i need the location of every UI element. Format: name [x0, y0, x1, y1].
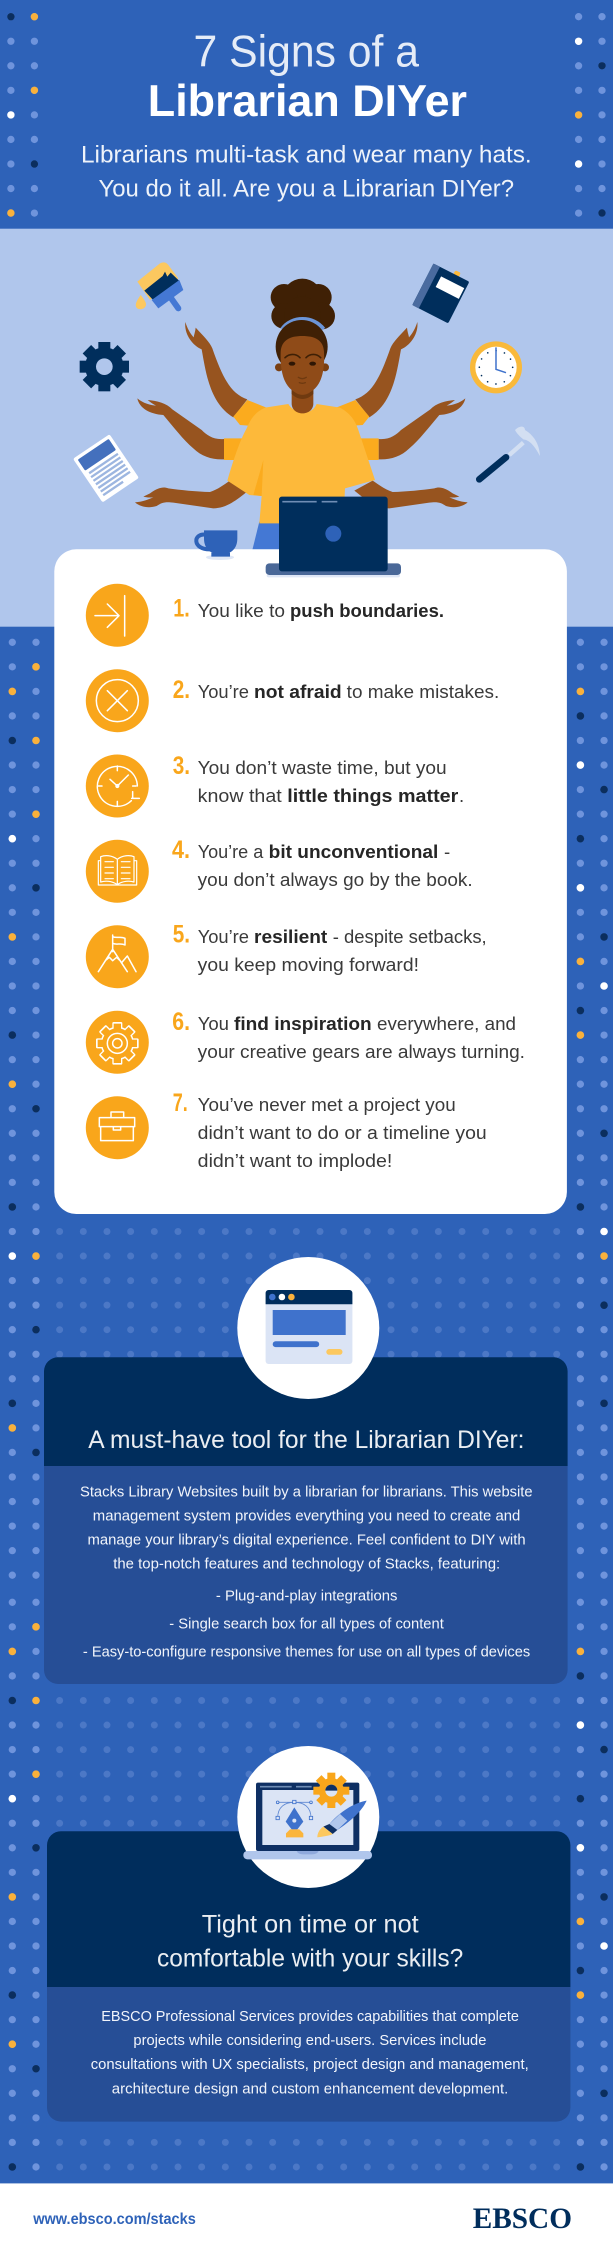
header dots: [11, 17, 602, 215]
sign 2: You’re: [198, 681, 249, 702]
panel: seven signs list: [54, 549, 567, 1214]
icon: gear: [80, 342, 129, 391]
sign 2: to make mistakes.: [347, 681, 499, 702]
sign 2: not afraid: [254, 681, 342, 702]
sign 5: - despite setbacks,: [333, 926, 487, 947]
sign 3: little things matter: [287, 785, 458, 806]
sign 6: 6.: [172, 1008, 190, 1036]
subtitle: Librarians multi-task and wear many hats.: [81, 141, 532, 168]
subtitle: [81, 141, 532, 203]
footer url: www.ebsco.com/stacks: [32, 2211, 196, 2228]
sign 4: bit unconventional: [269, 841, 438, 862]
body text: projects while considering end-users. Services include: [133, 2032, 486, 2049]
heading: [157, 1911, 463, 1972]
sign 5: resilient: [254, 926, 327, 947]
title: 7 Signs of a: [194, 28, 419, 77]
sign 7: 7.: [173, 1089, 188, 1117]
sign 4: 4.: [172, 836, 190, 864]
subtitle: You do it all. Are you a Librarian DIYer?: [98, 176, 514, 203]
title: Librarian DIYer: [148, 77, 467, 126]
sign 7: didn’t want to do or a timeline you: [198, 1122, 487, 1143]
sign 5: you keep moving forward!: [198, 954, 419, 975]
sign 7: didn’t want to implode!: [198, 1150, 392, 1171]
sign 3: know that: [198, 785, 283, 806]
sign 1: push boundaries.: [290, 600, 444, 621]
heading: comfortable with your skills?: [157, 1944, 463, 1972]
icon: book: [412, 260, 471, 323]
sign 7: [86, 1089, 487, 1171]
body text: management system provides everything you need to create and: [93, 1508, 520, 1525]
body text: - Easy-to-configure responsive themes for use on all types of devices: [83, 1643, 531, 1660]
body text: - Plug-and-play integrations: [216, 1587, 398, 1604]
sign 2: 2.: [173, 676, 190, 704]
icon: coffee cup: [196, 530, 237, 560]
sign 6: [86, 1008, 525, 1074]
icon: hammer: [479, 427, 540, 479]
icon: website window: [237, 1257, 379, 1399]
icon: laptop: [266, 497, 401, 577]
heading: Tight on time or not: [202, 1911, 419, 1939]
body text: [91, 2008, 529, 2097]
sign 5: 5.: [173, 921, 190, 949]
sign 1: You like to: [198, 600, 285, 621]
sign 6: find inspiration: [234, 1013, 372, 1034]
icon: laptop with pen tool, gear and brush: [237, 1746, 379, 1888]
sign 6: You: [198, 1013, 229, 1034]
sign 3: 3.: [173, 752, 190, 780]
sign 7: You’ve never met a project you: [198, 1094, 456, 1115]
sign 5: You’re: [198, 926, 249, 947]
sign 1: 1.: [173, 594, 190, 622]
body text: manage your library’s digital experience. Feel confident to DIY with: [88, 1532, 526, 1549]
body text: consultations with UX specialists, project design and management,: [91, 2056, 529, 2073]
icon: document: [73, 434, 139, 502]
title: [148, 28, 467, 126]
sign 1: [86, 584, 444, 647]
icon: clock: [470, 341, 522, 393]
footer logo: EBSCO: [473, 2203, 572, 2235]
icon: paint brush: [136, 262, 183, 309]
sign 5: [86, 921, 487, 988]
sign 4: [86, 836, 473, 903]
illustration: multi-armed librarian and floating objects: [73, 260, 540, 550]
sign 6: your creative gears are always turning.: [198, 1041, 525, 1062]
body text: the top-notch features and technology of Stacks, featuring:: [113, 1555, 500, 1572]
body text: [80, 1484, 533, 1660]
body text: EBSCO Professional Services provides capabilities that complete: [101, 2008, 519, 2025]
body text: - Single search box for all types of content: [169, 1615, 445, 1632]
sign 3: [86, 752, 464, 818]
heading: A must-have tool for the Librarian DIYer:: [88, 1426, 524, 1454]
woman: [135, 279, 468, 550]
sign 3: .: [459, 785, 464, 806]
panel: tight on time: [47, 1746, 570, 2122]
body text: Stacks Library Websites built by a librarian for librarians. This website: [80, 1484, 533, 1501]
sign 6: everywhere, and: [377, 1013, 516, 1034]
sign 4: You’re a: [198, 841, 264, 862]
outer and inner background dots: [12, 642, 604, 2170]
sign 3: You don’t waste time, but you: [198, 757, 447, 778]
sign 4: you don’t always go by the book.: [198, 869, 473, 890]
sign 4: -: [444, 841, 450, 862]
sign 2: [86, 669, 499, 732]
panel: must-have tool: [44, 1257, 568, 1684]
body text: architecture design and custom enhancement development.: [112, 2080, 508, 2097]
